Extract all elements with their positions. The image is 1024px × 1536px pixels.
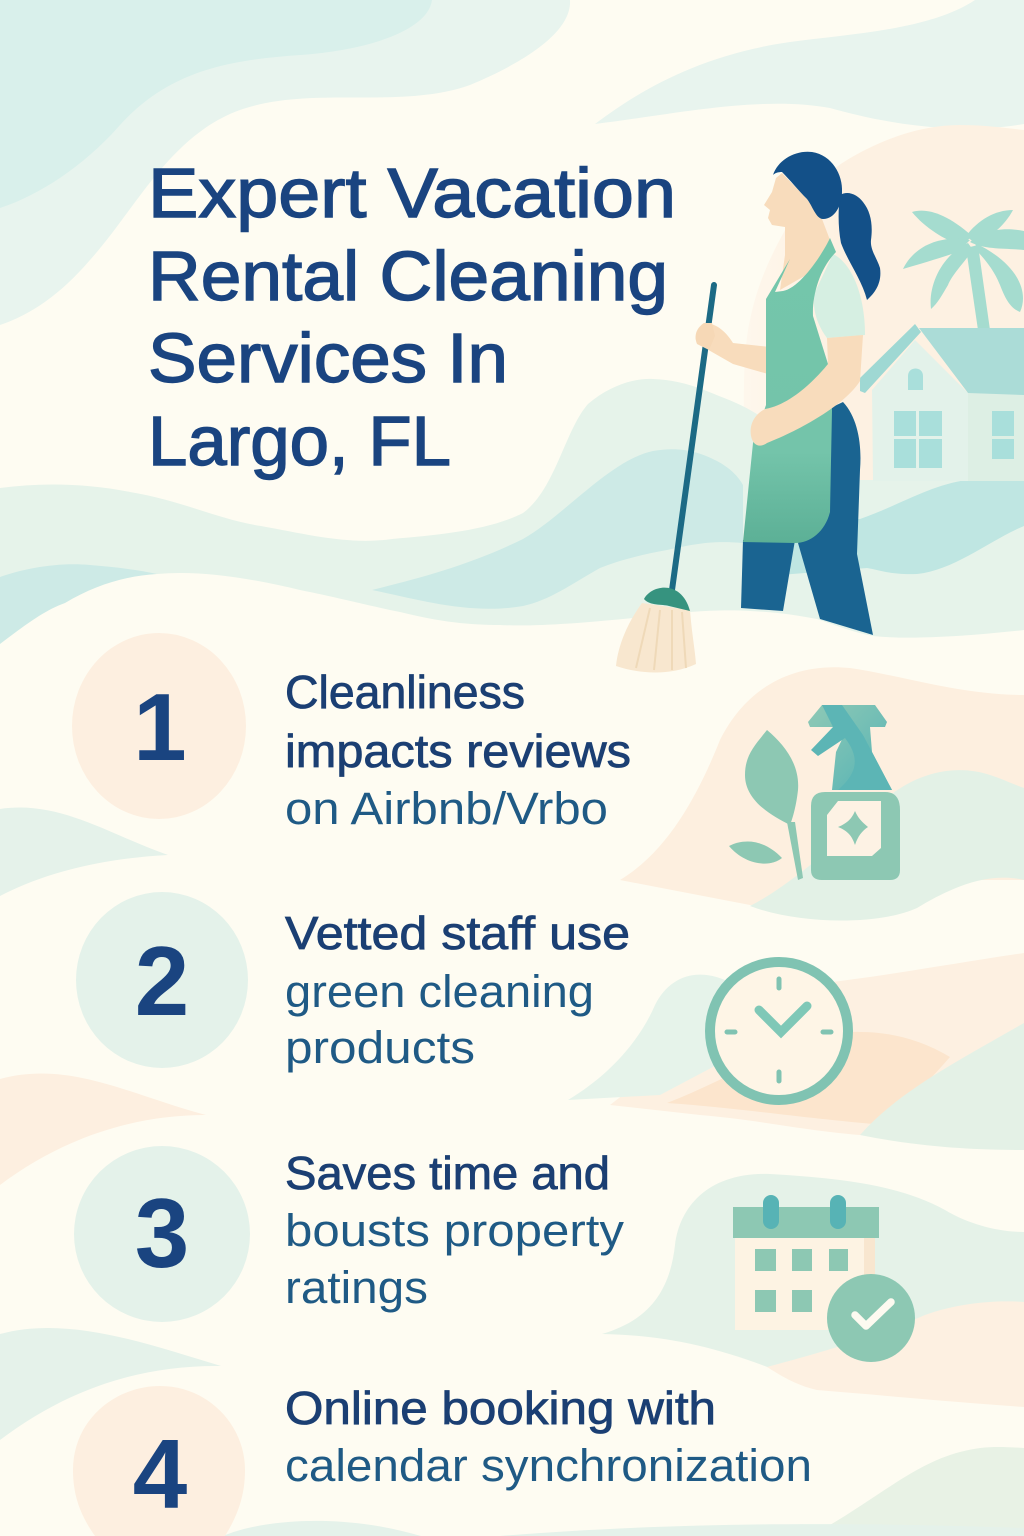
icon: clock	[710, 962, 848, 1100]
item 1	[72, 633, 900, 880]
item 4	[73, 1382, 812, 1536]
number badge 3	[74, 1146, 250, 1322]
hand over pole	[696, 323, 715, 350]
trousers	[741, 402, 873, 635]
number badge 4: 4	[133, 1419, 187, 1529]
item 3	[74, 1146, 915, 1362]
lower right wave group 2	[610, 953, 1024, 1135]
text: item 3: bousts property	[285, 1205, 625, 1256]
bottle label	[827, 801, 881, 856]
text: item 3: ratings	[285, 1262, 428, 1313]
broom pole	[672, 285, 714, 590]
number badge 2: 2	[135, 926, 189, 1036]
text: item 2: products	[285, 1022, 475, 1073]
title: Services In	[148, 319, 508, 397]
title: Expert Vacation	[148, 154, 676, 232]
lower right wave group 1	[620, 667, 1024, 905]
illustration: woman with broom	[616, 152, 880, 672]
number badge 4	[73, 1386, 245, 1536]
lower right wave group 3	[602, 1174, 1024, 1368]
number badge 1	[72, 633, 246, 819]
number badge 2	[76, 892, 248, 1068]
leaf	[729, 730, 803, 880]
text: item 1: impacts reviews	[285, 725, 631, 777]
title	[148, 154, 676, 480]
text: item 2: Vetted staff use	[285, 907, 630, 959]
house walls	[872, 340, 1024, 481]
item 2	[76, 892, 848, 1100]
text: item 3: Saves time and	[285, 1147, 610, 1199]
text: item 4: Online booking with	[285, 1382, 716, 1434]
number badge 3: 3	[135, 1178, 189, 1288]
text: item 1: on Airbnb/Vrbo	[285, 783, 608, 834]
left wedges	[0, 808, 168, 896]
text: item 4: calendar synchronization	[285, 1440, 812, 1491]
house roof	[919, 328, 1024, 395]
title: Rental Cleaning	[148, 237, 668, 315]
neck and face	[764, 173, 830, 290]
near arm and hand	[751, 335, 863, 446]
icon: calendar with check	[733, 1195, 915, 1362]
house windows	[894, 368, 1014, 468]
apron	[743, 238, 836, 543]
icon: palm tree	[903, 210, 1024, 330]
illustration: house and palm tree	[860, 210, 1024, 481]
icon: spray bottle and leaf	[729, 705, 900, 880]
text: item 2	[285, 907, 630, 1073]
bottle nozzle	[808, 705, 892, 790]
broom mop	[616, 603, 696, 672]
far arm and hand	[696, 323, 770, 374]
text: item 3	[285, 1147, 625, 1313]
broom head	[644, 588, 690, 611]
ponytail	[839, 193, 880, 300]
number badge 1: 1	[133, 674, 187, 781]
text: item 4	[285, 1382, 812, 1491]
sleeve	[814, 254, 865, 338]
hair	[773, 152, 842, 219]
title: Largo, FL	[148, 402, 451, 480]
text: item 2: green cleaning	[285, 966, 594, 1017]
bottle body	[811, 792, 900, 880]
text: item 1	[285, 666, 631, 834]
text: item 1: Cleanliness	[285, 666, 525, 718]
